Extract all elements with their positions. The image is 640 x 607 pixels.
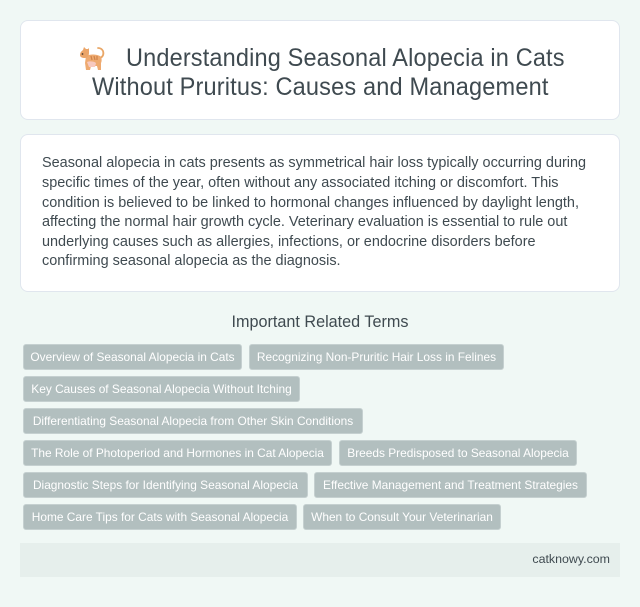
tag: [314, 472, 587, 498]
icon: cat: [80, 47, 104, 70]
tag: The Role of Photoperiod and Hormones in Cat Alopecia: [31, 446, 324, 460]
tag: [339, 440, 577, 466]
tag: Home Care Tips for Cats with Seasonal Alopecia: [32, 510, 288, 524]
tag: When to Consult Your Veterinarian: [311, 510, 493, 524]
tag: [23, 472, 308, 498]
tag: [23, 408, 363, 434]
footer domain: catknowy.com: [532, 552, 610, 566]
title text: Without Pruritus: Causes and Management: [92, 73, 549, 101]
intro text panel: condition is believed to be linked to hormonal changes influenced by daylight length,: [42, 195, 579, 211]
tag: Recognizing Non-Pruritic Hair Loss in Felines: [257, 350, 496, 364]
tag: Overview of Seasonal Alopecia in Cats: [30, 350, 235, 364]
intro text panel: [20, 134, 620, 292]
tag: Breeds Predisposed to Seasonal Alopecia: [347, 446, 569, 460]
tag: Differentiating Seasonal Alopecia from Other Skin Conditions: [33, 414, 353, 428]
related terms heading: Important Related Terms: [232, 313, 408, 331]
intro text panel: confirming seasonal alopecia as the diagnosis.: [42, 253, 341, 269]
tag: Key Causes of Seasonal Alopecia Without Itching: [31, 382, 292, 396]
intro text panel: underlying causes such as allergies, infections, or endocrine disorders before: [42, 234, 536, 250]
tag: Effective Management and Treatment Strategies: [323, 478, 578, 492]
intro text panel: Seasonal alopecia in cats presents as symmetrical hair loss typically occurring during: [42, 155, 586, 171]
tag: [23, 504, 297, 530]
tag: [23, 344, 242, 370]
title text: [92, 44, 565, 101]
intro text panel: specific times of the year, often without any associated itching or discomfort. This: [42, 175, 559, 191]
tag: [249, 344, 504, 370]
title text: Understanding Seasonal Alopecia in Cats: [126, 44, 565, 72]
tag: [23, 440, 332, 466]
footer bar: [20, 543, 620, 577]
intro text panel: affecting the normal hair growth cycle. Veterinary evaluation is essential to rule out: [42, 214, 567, 230]
related terms tags: [23, 344, 587, 530]
tag: [23, 376, 300, 402]
tag: Diagnostic Steps for Identifying Seasonal Alopecia: [33, 478, 298, 492]
tag: [303, 504, 501, 530]
title panel: [20, 20, 620, 120]
